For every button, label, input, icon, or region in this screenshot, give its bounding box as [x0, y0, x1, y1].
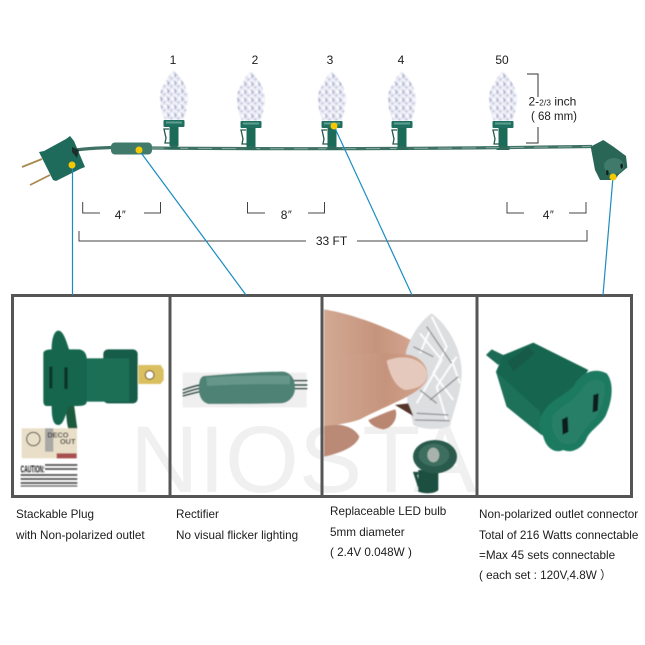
leader line: connector — [603, 177, 613, 295]
dimension: first 4 inch lead: 4 — [115, 208, 121, 222]
panel frame — [12, 295, 632, 496]
panel 1 image: stackable plug: OUT — [60, 437, 76, 446]
marker: bulb dot — [330, 122, 338, 130]
icon: bulb 4 — [388, 71, 416, 150]
watermark: NIOSTA — [130, 407, 477, 513]
panel 3 image: replaceable LED bulb in hand — [324, 309, 462, 493]
marker: plug dot — [68, 162, 76, 168]
caption: LED bulb: Replaceable LED bulb — [330, 505, 447, 518]
panel 1 image: stackable plug — [21, 331, 164, 487]
dimension: height label — [528, 94, 577, 123]
leader line: bulb — [334, 126, 412, 295]
marker: rectifier dot — [136, 146, 142, 154]
caption: LED bulb — [330, 505, 447, 559]
icon: bulb 50 — [489, 71, 517, 150]
label: bulb number 2: 2 — [252, 53, 259, 67]
icon: connector on string — [591, 140, 627, 180]
dimension: 33 FT total length — [79, 230, 587, 248]
caption: outlet connector: Total of 216 Watts connectable — [479, 529, 638, 542]
marker: connector dot — [610, 174, 616, 180]
icon: bulb 2 — [237, 71, 265, 150]
string wire — [76, 146, 592, 150]
caption: outlet connector: ( each set : 120V,4.8W ） — [479, 568, 612, 582]
caption: outlet connector — [479, 508, 638, 582]
panel 1 image: stackable plug: DECO — [47, 430, 69, 439]
caption: outlet connector: Non-polarized outlet connector — [479, 508, 638, 521]
icon: bulb 1 — [160, 70, 188, 149]
caption: LED bulb: 5mm diameter — [330, 526, 405, 539]
dimension: height label: ( 68 mm) — [531, 111, 577, 123]
dimension: last 4 inch lead: ″ — [549, 209, 554, 221]
caption: rectifier — [176, 508, 298, 542]
leader line: plug — [72, 165, 74, 295]
icon: plug on string — [22, 136, 85, 185]
caption: stackable plug: Stackable Plug — [16, 508, 94, 521]
caption: outlet connector: =Max 45 sets connectable — [479, 549, 615, 562]
icon: bulb 3 — [318, 71, 346, 150]
caption: LED bulb: ( 2.4V 0.048W ) — [330, 546, 412, 559]
caption: stackable plug: with Non-polarized outlet — [15, 529, 145, 542]
dimension: 8 inch spacing — [248, 202, 324, 222]
label: bulb number 50: 50 — [495, 53, 509, 67]
caption: stackable plug — [15, 508, 145, 542]
label: bulb number 4: 4 — [398, 53, 405, 67]
dimension: height label: 2-2/3 inch — [528, 94, 576, 108]
leader line: rectifier — [139, 150, 246, 295]
dimension: last 4 inch lead: 4 — [543, 208, 549, 222]
label: bulb number 3: 3 — [327, 53, 334, 67]
panel 4 image: outlet connector — [486, 343, 612, 451]
dimension: 33 FT total length: 33 FT — [316, 234, 348, 248]
dimension: 8 inch spacing: 8 — [281, 208, 287, 222]
dimension: height bracket — [526, 74, 538, 143]
dimension: first 4 inch lead — [83, 202, 160, 222]
label: bulb number 1: 1 — [170, 53, 177, 67]
dimension: last 4 inch lead — [507, 202, 586, 222]
panel 1 image: stackable plug: CAUTION: — [21, 465, 45, 476]
dimension: first 4 inch lead: ″ — [121, 209, 126, 221]
caption: rectifier: Rectifier — [176, 508, 219, 521]
panel 2 image: rectifier — [183, 372, 307, 407]
icon: rectifier on string — [111, 142, 152, 154]
caption: rectifier: No visual flicker lighting — [176, 529, 298, 542]
dimension: 8 inch spacing: ″ — [287, 209, 292, 221]
